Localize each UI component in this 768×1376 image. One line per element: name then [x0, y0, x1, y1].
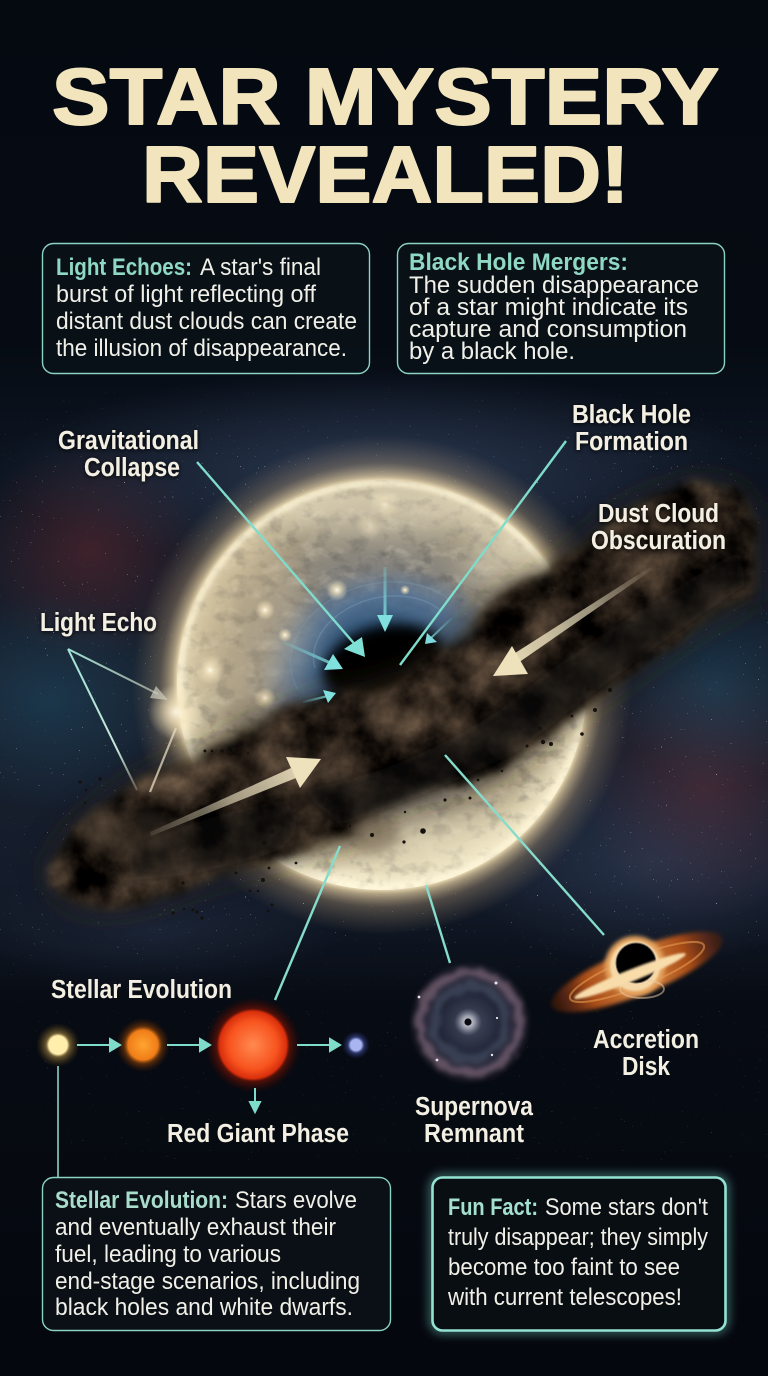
title: REVEALED!	[142, 130, 629, 219]
arrow: left infall	[283, 642, 343, 670]
dust cloud band	[62, 494, 745, 897]
debris particles	[78, 568, 612, 920]
panel: stellar evolution	[42, 1178, 390, 1330]
panel: light echoes	[42, 244, 370, 374]
panel: light echoes: A star's final	[200, 254, 321, 281]
panel: stellar evolution: end-stage scenarios, including	[55, 1268, 360, 1295]
labels on the diagram: Black Hole	[572, 401, 691, 429]
panel: stellar evolution: Stellar Evolution:	[55, 1187, 228, 1214]
labels on the diagram: Dust Cloud	[598, 500, 719, 528]
labels on the diagram: Gravitational	[58, 427, 199, 455]
panel: stellar evolution: Stars evolve	[235, 1187, 357, 1214]
background space	[0, 370, 768, 1160]
panel: light echoes: the illusion of disappearance.	[56, 335, 347, 362]
labels on the diagram	[40, 401, 726, 637]
arrow: right infall	[425, 618, 452, 644]
panel: stellar evolution: and eventually exhaust their	[55, 1214, 336, 1241]
light echo pointers	[68, 649, 204, 792]
stellar evolution sequence	[36, 976, 370, 1148]
black hole	[291, 582, 453, 716]
panel: fun fact	[432, 1178, 726, 1330]
connector to stellar evolution panel	[57, 1066, 59, 1177]
panel: black hole mergers: Black Hole Mergers:	[409, 249, 628, 276]
labels on the diagram: Collapse	[84, 454, 180, 482]
supernova remnant: Supernova	[415, 1093, 534, 1121]
panel: fun fact: with current telescopes!	[447, 1284, 682, 1311]
supernova remnant: Remnant	[424, 1120, 524, 1148]
arrow: centre infall	[377, 567, 393, 632]
panel: black hole mergers: by a black hole.	[409, 338, 575, 365]
panel: light echoes: burst of light reflecting off	[56, 281, 316, 308]
panel: light echoes: Light Echoes:	[56, 254, 192, 281]
star sphere	[132, 435, 632, 935]
panel: fun fact: Some stars don't	[545, 1194, 708, 1221]
panel: fun fact: Fun Fact:	[448, 1194, 538, 1221]
stellar evolution sequence: Stellar Evolution	[51, 976, 232, 1004]
arrow: lower infall	[303, 690, 336, 703]
panel: stellar evolution: black holes and white dwarfs.	[55, 1294, 353, 1321]
panel: black hole mergers: capture and consumption	[409, 316, 687, 343]
accretion disk	[543, 917, 731, 1081]
panel: black hole mergers: The sudden disappearance	[409, 272, 699, 299]
stellar evolution sequence: Red Giant Phase	[167, 1120, 349, 1148]
accretion disk: Disk	[622, 1053, 671, 1081]
panel: black hole mergers: of a star might indicate its	[409, 294, 688, 321]
accretion disk: Accretion	[593, 1026, 699, 1054]
panel: black hole mergers	[398, 244, 724, 374]
arrow: dust obscuration	[493, 567, 652, 676]
callout lines to lower diagrams	[275, 755, 604, 1000]
supernova remnant	[408, 961, 534, 1148]
panel: fun fact: become too faint to see	[448, 1254, 680, 1281]
labels on the diagram: Formation	[575, 428, 688, 456]
title: STAR MYSTERY	[52, 52, 719, 141]
arrow: black hole formation	[400, 441, 566, 665]
panel: light echoes: distant dust clouds can create	[56, 308, 357, 335]
arrow: gravitational collapse	[197, 462, 365, 657]
labels on the diagram: Light Echo	[40, 609, 157, 637]
arrow: dust lower	[150, 757, 321, 836]
title	[52, 52, 719, 219]
panel: stellar evolution: fuel, leading to various	[55, 1241, 281, 1268]
panel: fun fact: truly disappear; they simply	[448, 1224, 708, 1251]
labels on the diagram: Obscuration	[591, 527, 726, 555]
